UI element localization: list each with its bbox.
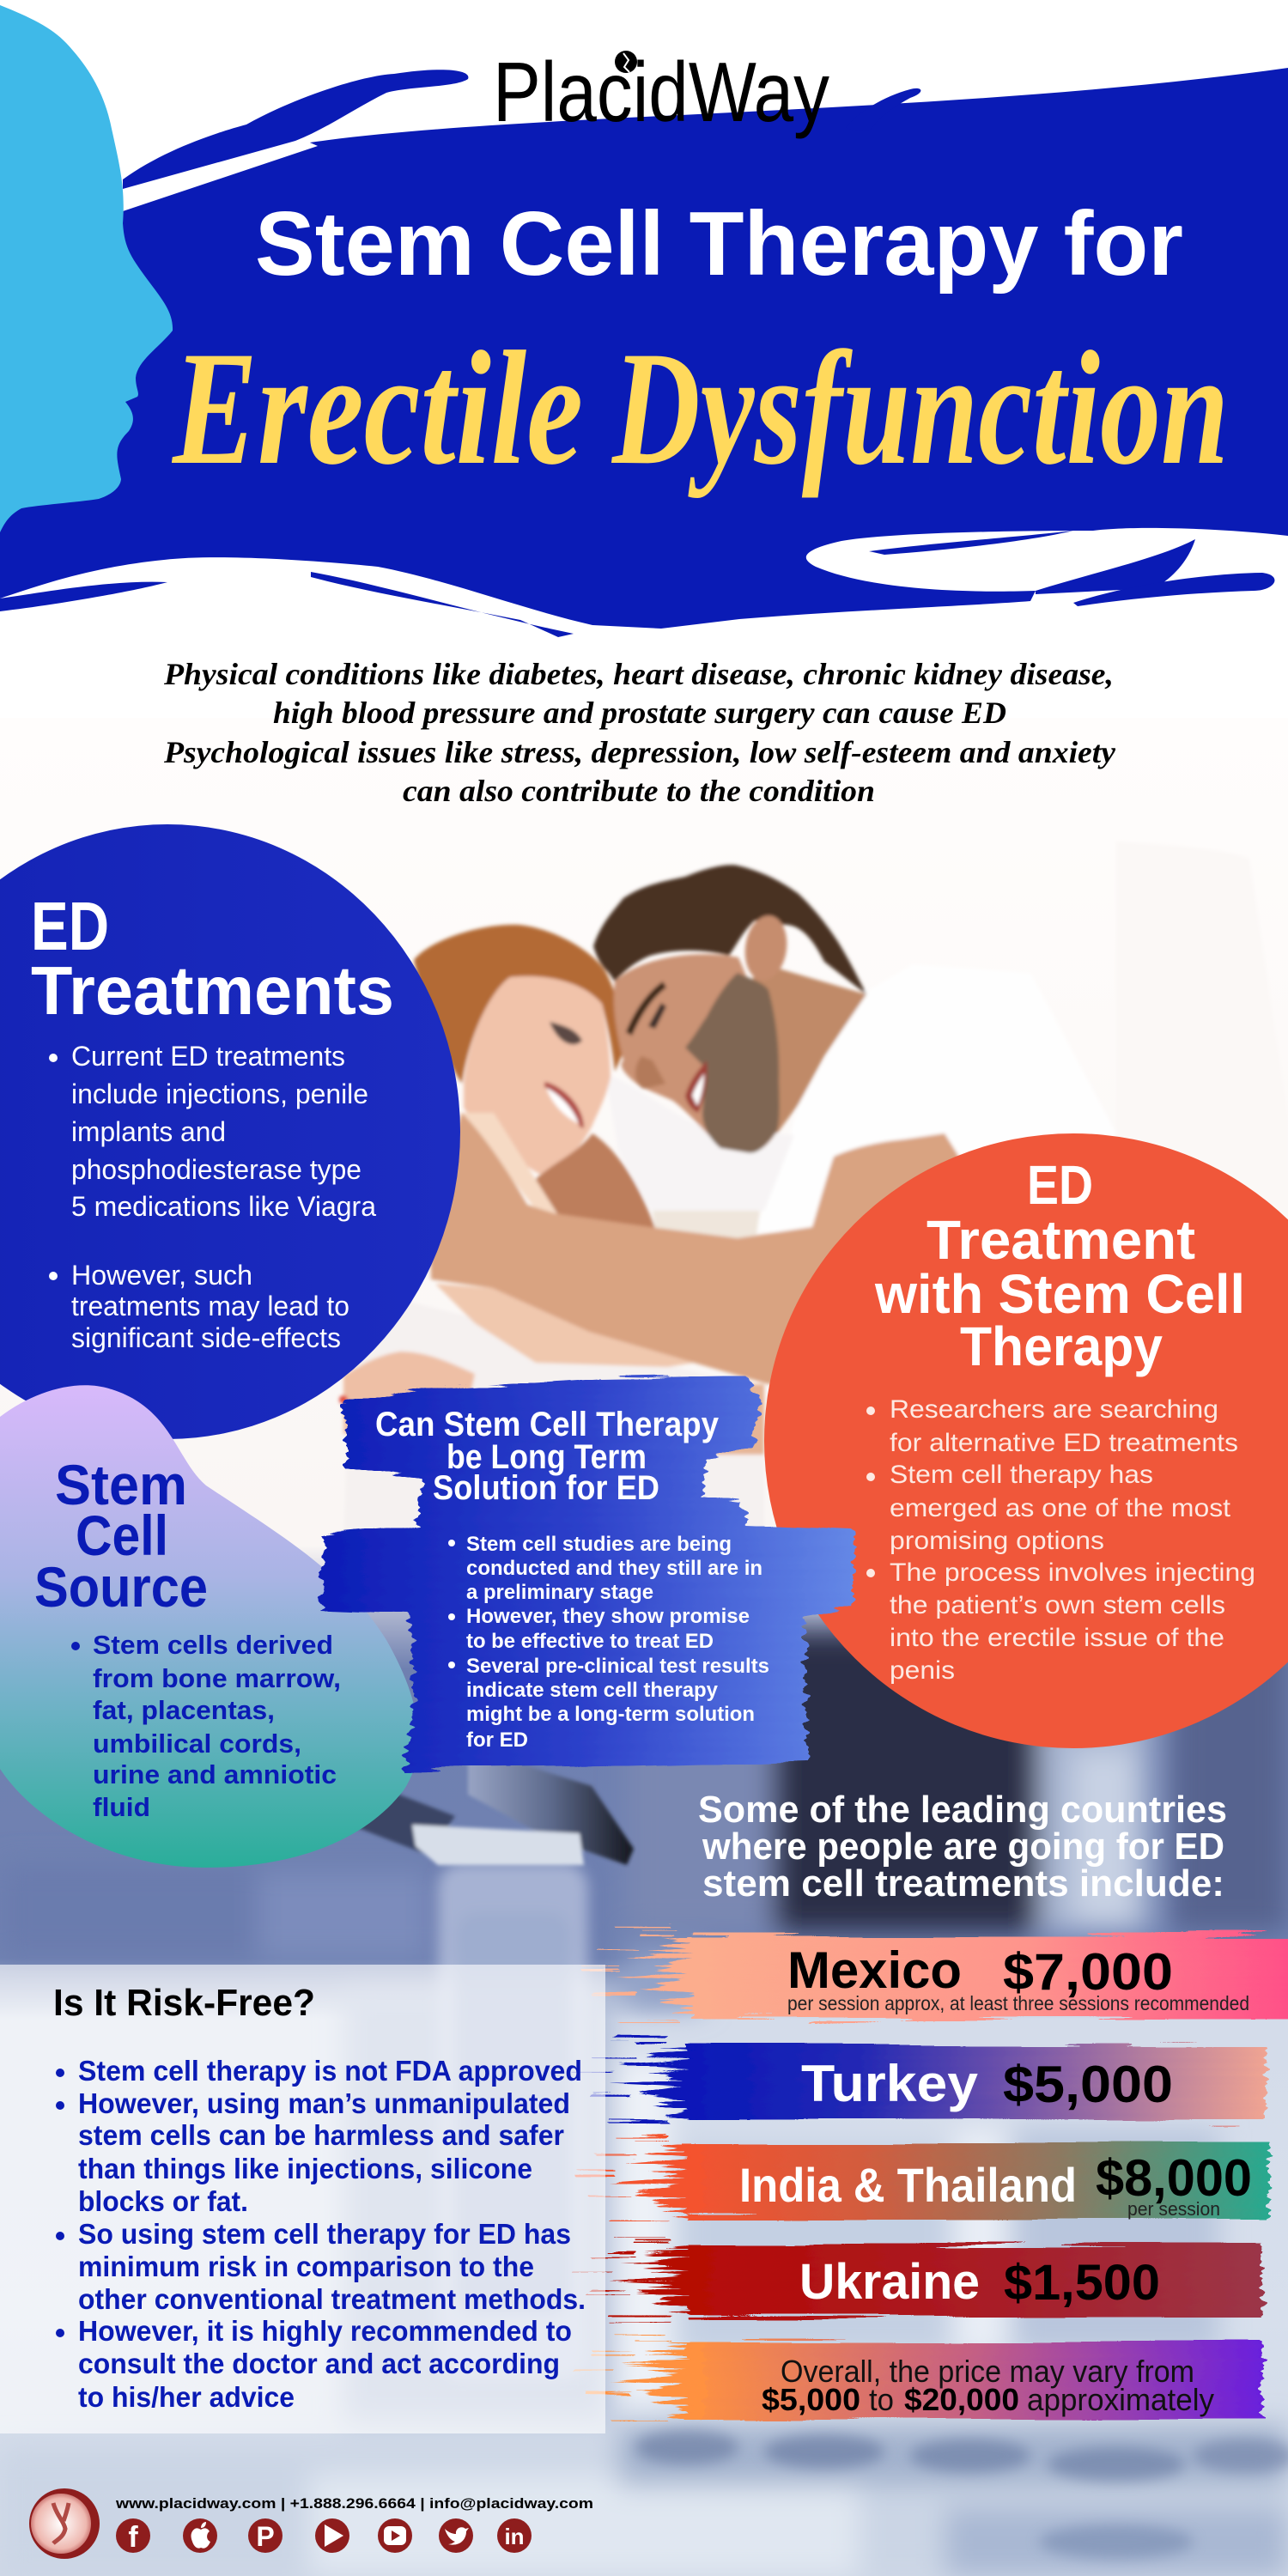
bullet list: long term solution: for ED [466, 1728, 528, 1752]
panel: Stem Cell Source [0, 1385, 418, 1868]
footer: contact details: www.placidway.com | +1.888.296.6664 | info@placidway.com [115, 2495, 593, 2512]
price bar: overall range: $5,000 [762, 2382, 860, 2417]
price bar: Mexico [580, 1926, 1288, 2023]
price bar: India and Thailand: $8,000 [1096, 2149, 1252, 2207]
icon: light-blue head silhouette [0, 5, 173, 532]
price bar: Mexico: Mexico [787, 1941, 962, 1999]
heading: long term solution [375, 1406, 720, 1507]
bullet list: ED Treatments: However, such [71, 1260, 252, 1291]
bullet list: risk: However, it is highly recommended to [78, 2315, 572, 2347]
panel: ED Treatment with Stem Cell Therapy [764, 1133, 1288, 1748]
bullet list: ED Treatments: include injections, penile [71, 1078, 368, 1109]
heading: ED Treatment with Stem Cell Therapy: Treatment [927, 1209, 1195, 1271]
bullet list: stem cell sources: from bone marrow, [93, 1663, 341, 1693]
intro text [163, 657, 1116, 808]
bullet list: risk: blocks or fat. [78, 2185, 248, 2217]
bullet list: risk: other conventional treatment methods. [78, 2283, 586, 2315]
bullet list: risk: consult the doctor and act according [78, 2348, 560, 2379]
footer: logo emblem [29, 2488, 100, 2559]
price bar: overall range [575, 2334, 1262, 2421]
bullet list: stem cell therapy: the patient’s own stem cells [890, 1591, 1225, 1619]
price bar: India and Thailand: per session [1127, 2198, 1220, 2220]
icon: facebook: f [128, 2521, 138, 2554]
intro text: Psychological issues like stress, depression, low self-esteem and anxiety [163, 735, 1116, 769]
price bar: Mexico: $7,000 [1003, 1943, 1173, 2001]
icon: pinterest: P [256, 2521, 275, 2552]
price bar: Turkey: Turkey [801, 2055, 979, 2112]
price bar: overall range: to [869, 2382, 894, 2417]
bullet list: ED Treatments: Current ED treatments [71, 1041, 345, 1072]
bullet list: stem cell therapy: penis [890, 1656, 955, 1685]
woman's hand [343, 1352, 475, 1434]
bullet list: ED Treatments: implants and [71, 1116, 226, 1147]
icon: pinterest [248, 2518, 283, 2553]
bullet list: stem cell sources: fat, placentas, [93, 1695, 275, 1725]
bullet list: risk: minimum risk in comparison to the [78, 2251, 534, 2282]
bullet list: long term solution: Stem cell studies are being [466, 1533, 732, 1556]
price bar: Turkey: $5,000 [1003, 2056, 1173, 2113]
man's arm [429, 1113, 987, 1384]
header: blue brush banner [0, 68, 1288, 637]
woman's face [464, 976, 611, 1179]
panel: Can Stem Cell Therapy be Long Term Solution [319, 1376, 854, 1769]
heading: leading countries [698, 1789, 1227, 1905]
warm photo backdrop [0, 718, 1288, 1662]
bullet list: stem cell therapy: for alternative ED treatments [890, 1429, 1238, 1457]
title: Erectile Dysfunction: Erectile [171, 319, 583, 499]
bullet list: stem cell therapy: into the erectile issue of the [890, 1624, 1224, 1652]
price bar: Mexico: per session approx, at least three sessions recommended [787, 1992, 1249, 2014]
price bar: India and Thailand [575, 2135, 1269, 2222]
bullet list: stem cell sources: urine and amniotic [93, 1759, 337, 1789]
title: Stem Cell Therapy for: Stem Cell Therapy for [255, 193, 1183, 295]
heading: long term solution: be Long Term [447, 1438, 647, 1476]
bullet list: long term solution: indicate stem cell therapy [466, 1679, 719, 1702]
icon: twitter [439, 2518, 473, 2553]
heading: ED Treatments [31, 888, 394, 1029]
man's face [614, 954, 777, 1153]
price bar: overall range: approximately [1027, 2382, 1214, 2417]
bullet list: stem cell therapy: Researchers are searching [890, 1395, 1218, 1424]
price bar: overall range: Overall, the price may vary from [781, 2354, 1194, 2389]
bullet list: stem cell sources: Stem cells derived [93, 1630, 333, 1660]
heading: leading countries: where people are going for ED [702, 1826, 1224, 1868]
panel: ED Treatments [0, 824, 460, 1439]
bullet list: stem cell therapy: The process involves injecting [890, 1558, 1255, 1587]
price bar: Ukraine: $1,500 [1004, 2255, 1160, 2311]
bullet list: risk: So using stem cell therapy for ED has [78, 2218, 571, 2250]
bullet list: stem cell therapy: Stem cell therapy has [890, 1461, 1153, 1489]
heading: ED Treatment with Stem Cell Therapy: with Stem Cell [874, 1263, 1245, 1325]
intro text: can also contribute to the condition [403, 774, 875, 808]
man's hair [593, 865, 866, 994]
heading: leading countries: stem cell treatments include: [702, 1862, 1224, 1905]
bullet list: long term solution [448, 1533, 769, 1752]
heading: ED Treatment with Stem Cell Therapy [874, 1154, 1245, 1377]
heading: Stem Cell Source: Cell [76, 1504, 168, 1567]
icon: linkedin [497, 2518, 532, 2553]
woman's hand under chin [536, 1133, 657, 1233]
heading: ED Treatments: Treatments [31, 952, 394, 1029]
photo: laboratory backdrop [0, 1546, 1288, 2576]
heading: ED Treatments: ED [31, 888, 109, 964]
man's beard [685, 973, 780, 1153]
bullet list: risk: than things like injections, silicone [78, 2153, 532, 2184]
icon: linkedin: in [504, 2524, 525, 2549]
photo: couple in bed [339, 841, 1288, 1546]
footer: social icons [116, 2518, 532, 2554]
heading: Stem Cell Source: Source [34, 1555, 208, 1619]
bullet list: risk: to his/her advice [78, 2381, 295, 2413]
bullet list: stem cell therapy [866, 1395, 1255, 1685]
bullet list: long term solution: However, they show promise [466, 1605, 750, 1628]
icon: apple [183, 2518, 217, 2553]
intro text: Physical conditions like diabetes, heart disease, chronic kidney disease, [163, 657, 1114, 691]
icon: play store [315, 2518, 349, 2553]
bullet list: ED Treatments: treatments may lead to [71, 1291, 349, 1321]
intro text: high blood pressure and prostate surgery can cause ED [273, 696, 1006, 730]
title: Erectile Dysfunction [171, 319, 1229, 499]
heading: long term solution: Solution for ED [433, 1469, 659, 1507]
bullet list: risk: stem cells can be harmless and safer [78, 2119, 564, 2151]
bullet list: risk [56, 2055, 586, 2413]
man's neck [738, 962, 866, 1133]
bullet list: stem cell sources: umbilical cords, [93, 1728, 301, 1759]
icon: facebook [116, 2518, 150, 2554]
price bar: Ukraine: Ukraine [799, 2254, 980, 2310]
bullet list: ED Treatments: 5 medications like Viagra [71, 1191, 376, 1222]
bullet list: stem cell therapy: promising options [890, 1527, 1104, 1555]
bullet list: ED Treatments [49, 1041, 376, 1353]
price bar: overall range: $20,000 [904, 2382, 1019, 2417]
bullet list: long term solution: Several pre-clinical test results [466, 1655, 769, 1678]
panel: Is It Risk-Free [0, 1965, 605, 2433]
logo: PlacidWay: PlacidWay [493, 45, 829, 139]
woman's arm [435, 1284, 694, 1367]
bullet list: ED Treatments: phosphodiesterase type [71, 1154, 361, 1185]
woman's hair [414, 925, 623, 1084]
icon: youtube [378, 2518, 412, 2553]
bullet list: stem cell therapy: emerged as one of the most [890, 1494, 1231, 1522]
bullet list: ED Treatments: significant side-effects [71, 1322, 341, 1353]
bullet list: long term solution: might be a long-term solution [466, 1703, 755, 1726]
bullet list: risk: Stem cell therapy is not FDA approved [78, 2055, 582, 2087]
bullet list: long term solution: conducted and they still are in [466, 1557, 762, 1580]
heading: Is It Risk-Free: Is It Risk-Free? [53, 1982, 315, 2024]
bullet list: stem cell sources [71, 1630, 341, 1822]
heading: Stem Cell Source: Stem [55, 1453, 187, 1516]
bullet list: risk: However, using man’s unmanipulated [78, 2087, 570, 2119]
price bar: India and Thailand: India & Thailand [739, 2158, 1077, 2212]
bullet list: long term solution: to be effective to treat ED [466, 1630, 714, 1653]
heading: ED Treatment with Stem Cell Therapy: ED [1027, 1154, 1093, 1216]
heading: leading countries: Some of the leading countries [698, 1789, 1227, 1831]
price bar: Ukraine [575, 2235, 1262, 2321]
heading: ED Treatment with Stem Cell Therapy: Therapy [960, 1315, 1163, 1377]
price bar: Turkey [575, 2036, 1266, 2123]
heading: long term solution: Can Stem Cell Therapy [375, 1406, 720, 1443]
bullet list: stem cell sources: fluid [93, 1792, 150, 1822]
bullet list: long term solution: a preliminary stage [466, 1581, 653, 1604]
heading: Stem Cell Source [34, 1453, 208, 1619]
